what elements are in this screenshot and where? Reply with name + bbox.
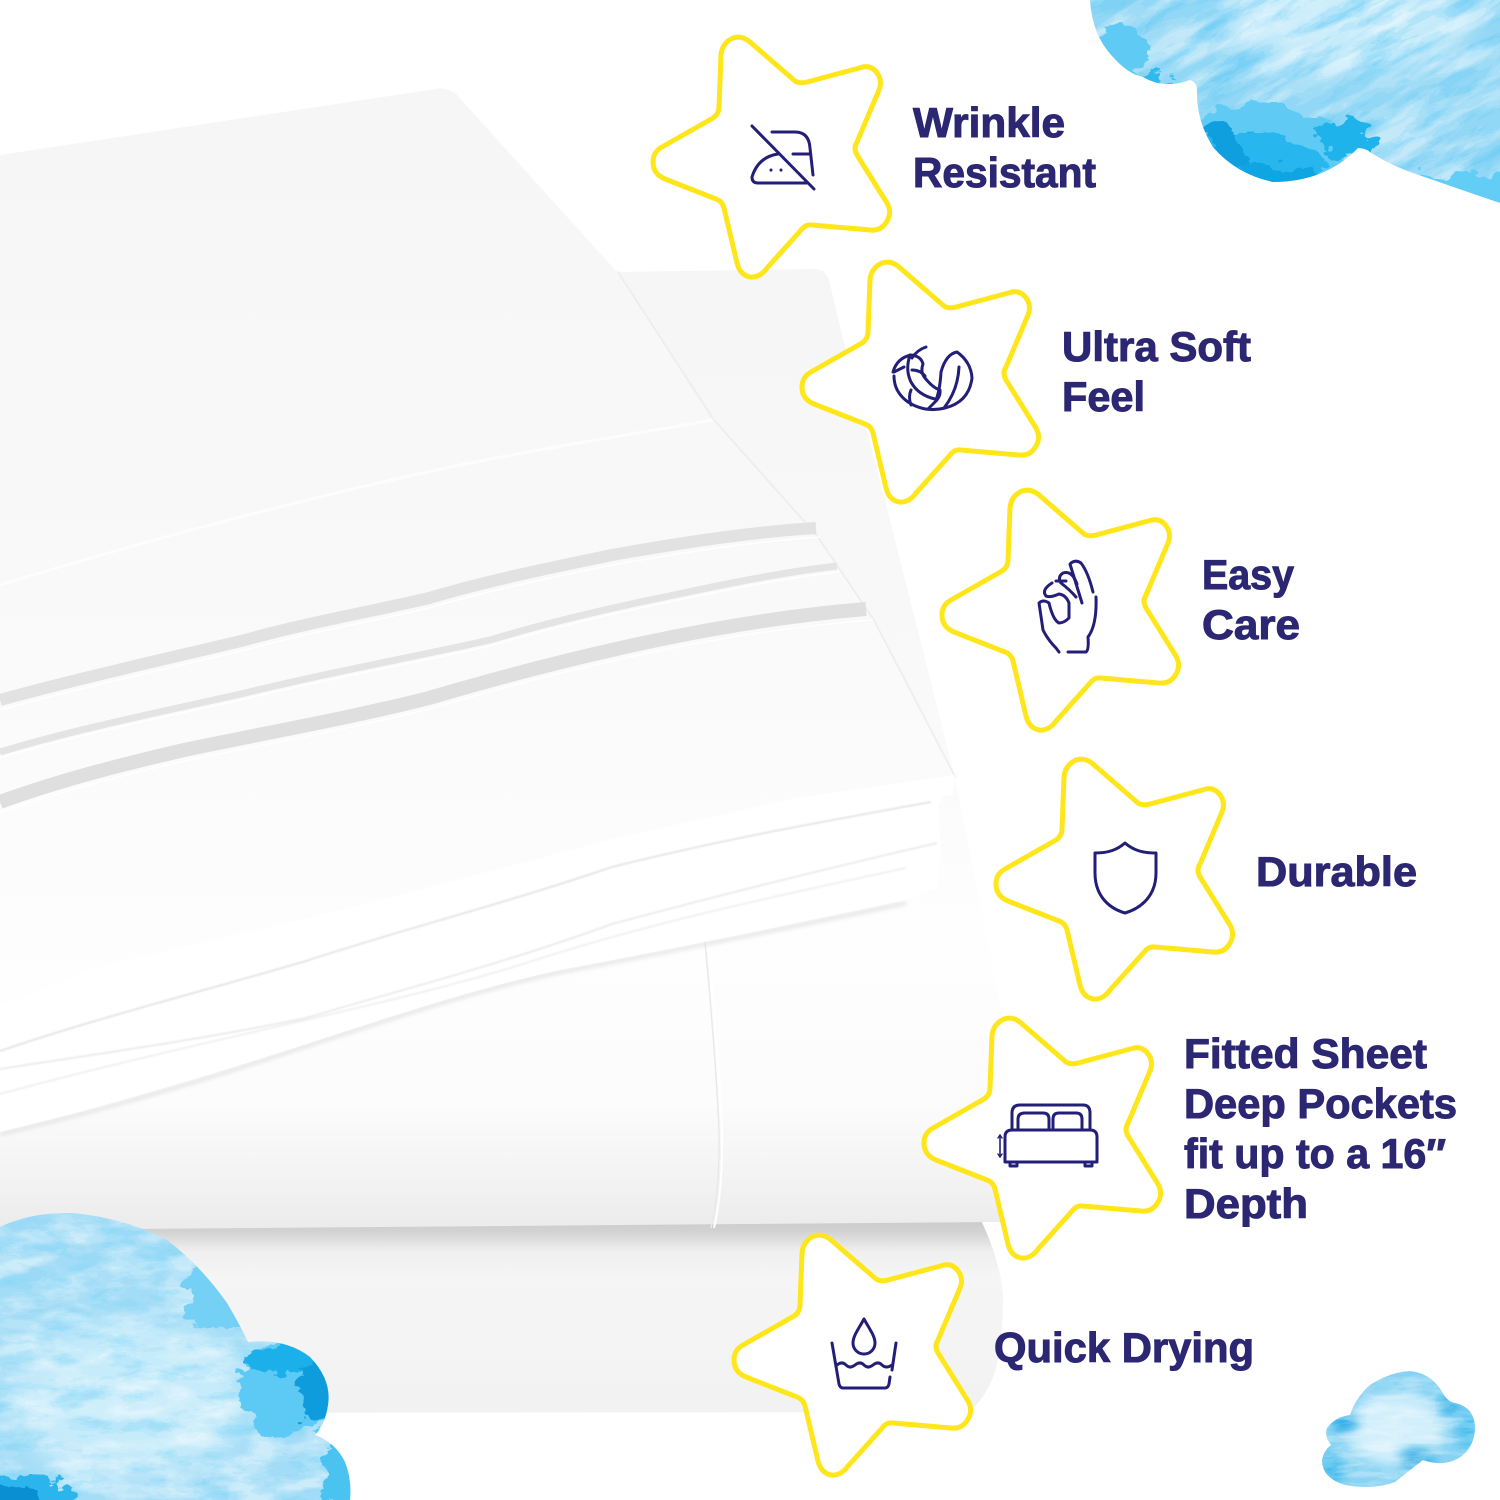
lowest folded sheet layer [0, 1218, 1003, 1413]
star badge [653, 37, 890, 277]
label: Resistant [913, 149, 1096, 196]
feature: quick drying [734, 1235, 1254, 1475]
light centre wash [10, 1320, 250, 1480]
label [913, 99, 1096, 196]
icon: shield [1095, 843, 1156, 913]
star badge [996, 759, 1233, 999]
folded pile edges [0, 778, 955, 1132]
cloud: bottom right [1322, 1371, 1475, 1487]
icon: water drop over basin [832, 1319, 896, 1388]
watercolor texture [1322, 1371, 1475, 1486]
watercolor texture [0, 1217, 328, 1500]
feature: fitted sheet deep pockets [924, 1018, 1457, 1258]
label: fit up to a 16″ [1184, 1130, 1446, 1177]
darker rim pools [1090, 22, 1500, 208]
star badge [924, 1018, 1161, 1258]
star badge [802, 262, 1039, 502]
star badge [734, 1235, 971, 1475]
icon: feather [893, 347, 972, 410]
label: Ultra Soft [1062, 323, 1251, 370]
cloud: top right [1090, 0, 1500, 203]
soft shadow under the folded pile [0, 903, 906, 1134]
icon: ok hand gesture [1039, 561, 1096, 652]
label: Feel [1062, 373, 1145, 420]
label: Deep Pockets [1184, 1080, 1457, 1127]
label: Fitted Sheet [1184, 1030, 1427, 1077]
soft edge shadow along pillowcase [617, 272, 955, 778]
label [1184, 1030, 1457, 1227]
label: Durable [1256, 848, 1417, 895]
photo: folded white bed sheets [0, 89, 1003, 1413]
feature: wrinkle resistant [653, 37, 1096, 277]
label: Quick Drying [994, 1324, 1254, 1371]
label: Wrinkle [913, 99, 1065, 146]
darker rim pools [0, 1257, 356, 1500]
sheet seam [705, 942, 722, 1228]
star badge [942, 490, 1179, 730]
feature: ultra soft feel [802, 262, 1251, 502]
cloud: bottom left [0, 1205, 360, 1500]
feature: easy care [942, 490, 1300, 730]
middle flat sheet [0, 155, 1003, 1230]
top pillowcase [0, 89, 955, 1006]
light centre wash [1347, 1394, 1443, 1466]
icon: bed [998, 1105, 1097, 1166]
light centre wash [1230, 0, 1470, 70]
feature: durable [996, 759, 1417, 999]
label: Depth [1184, 1180, 1308, 1227]
label [1062, 323, 1251, 420]
hem crease [0, 420, 713, 585]
icon: crossed-out iron [752, 126, 814, 189]
embroidered stripes [0, 528, 873, 813]
pillowcase hem [0, 775, 955, 1040]
label: Easy [1202, 551, 1295, 598]
dark spots [1400, 1449, 1434, 1467]
label: Care [1202, 601, 1300, 648]
label [1202, 551, 1300, 648]
watercolor texture [1090, 0, 1500, 202]
